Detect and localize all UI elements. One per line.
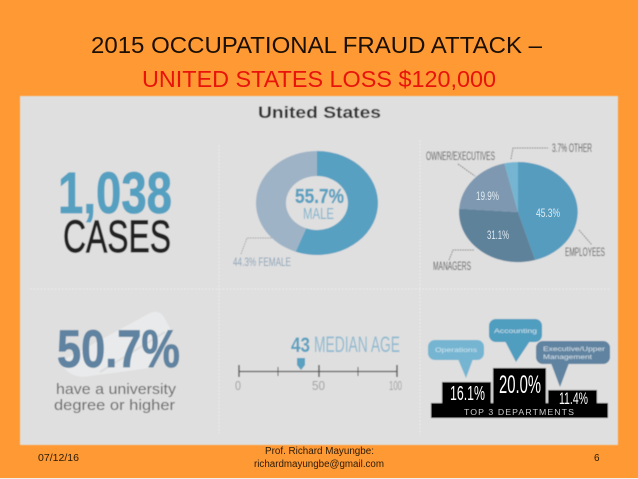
heading: United States: United States	[258, 103, 381, 122]
footer: page number: 6	[594, 453, 600, 464]
chart: gender donut: 55.7%	[295, 186, 344, 208]
callout: Operations	[428, 340, 484, 378]
icon: age marker	[297, 358, 305, 370]
callout: Executive/Upper Management	[536, 341, 610, 387]
podium labels: 11.4%	[559, 389, 588, 408]
pie percentages: 45.3%	[536, 206, 560, 220]
panel: cases: CASES	[63, 211, 171, 262]
podium blocks	[431, 368, 608, 418]
title: UNITED STATES LOSS $120,000	[142, 66, 496, 92]
chart: median age timeline	[235, 332, 402, 393]
pie percentages	[476, 189, 560, 242]
pie percentages: 19.9%	[476, 189, 499, 203]
footer: author: richardmayungbe@gmail.com	[254, 459, 384, 470]
chart: perpetrator position pie	[426, 143, 605, 273]
chart: median age timeline: 100	[389, 378, 402, 393]
title	[91, 32, 542, 92]
chart: perpetrator position pie: MANAGERS	[433, 261, 471, 273]
podium labels: 20.0%	[499, 371, 541, 399]
chart: median age timeline: MEDIAN AGE	[314, 332, 400, 357]
callout: Executive/Upper Management: Executive/Upper	[543, 346, 606, 353]
chart: gender donut	[233, 151, 378, 269]
title: 2015 OCCUPATIONAL FRAUD ATTACK –	[91, 32, 542, 58]
podium labels	[450, 371, 588, 417]
podium labels: TOP 3 DEPARTMENTS	[464, 408, 575, 417]
chart: top 3 departments podium	[428, 319, 610, 418]
footer: author	[254, 446, 384, 470]
panel: university degree: 50.7%	[57, 320, 180, 379]
panel: cases: 1,038	[58, 161, 172, 226]
panel: infographic	[20, 96, 618, 445]
panel: university degree: have a university	[56, 381, 177, 398]
callout: Accounting: Accounting	[494, 328, 537, 335]
chart: gender donut: 44.3% FEMALE	[233, 257, 291, 269]
callout: Operations: Operations	[435, 347, 478, 354]
chart: gender donut: MALE	[303, 206, 334, 223]
chart: median age timeline: 50	[312, 378, 325, 393]
panel: university degree	[54, 312, 180, 414]
panel: university degree: degree or higher	[54, 397, 175, 414]
chart: median age timeline: 43	[291, 334, 310, 357]
callout: Accounting	[489, 319, 542, 362]
footer: author: Prof. Richard Mayungbe:	[265, 446, 374, 457]
chart: perpetrator position pie: 3.7% OTHER	[552, 143, 592, 155]
footer: date: 07/12/16	[38, 453, 79, 464]
podium labels: 16.1%	[450, 383, 485, 405]
chart: median age timeline: 0	[235, 378, 241, 393]
callout: Executive/Upper Management: Management	[543, 354, 592, 361]
chart: perpetrator position pie: EMPLOYEES	[565, 247, 605, 259]
icon: graduation cap	[60, 312, 171, 377]
panel: cases	[58, 161, 172, 262]
chart: perpetrator position pie: OWNER/EXECUTIVES	[426, 151, 495, 163]
pie percentages: 31.1%	[487, 228, 509, 242]
